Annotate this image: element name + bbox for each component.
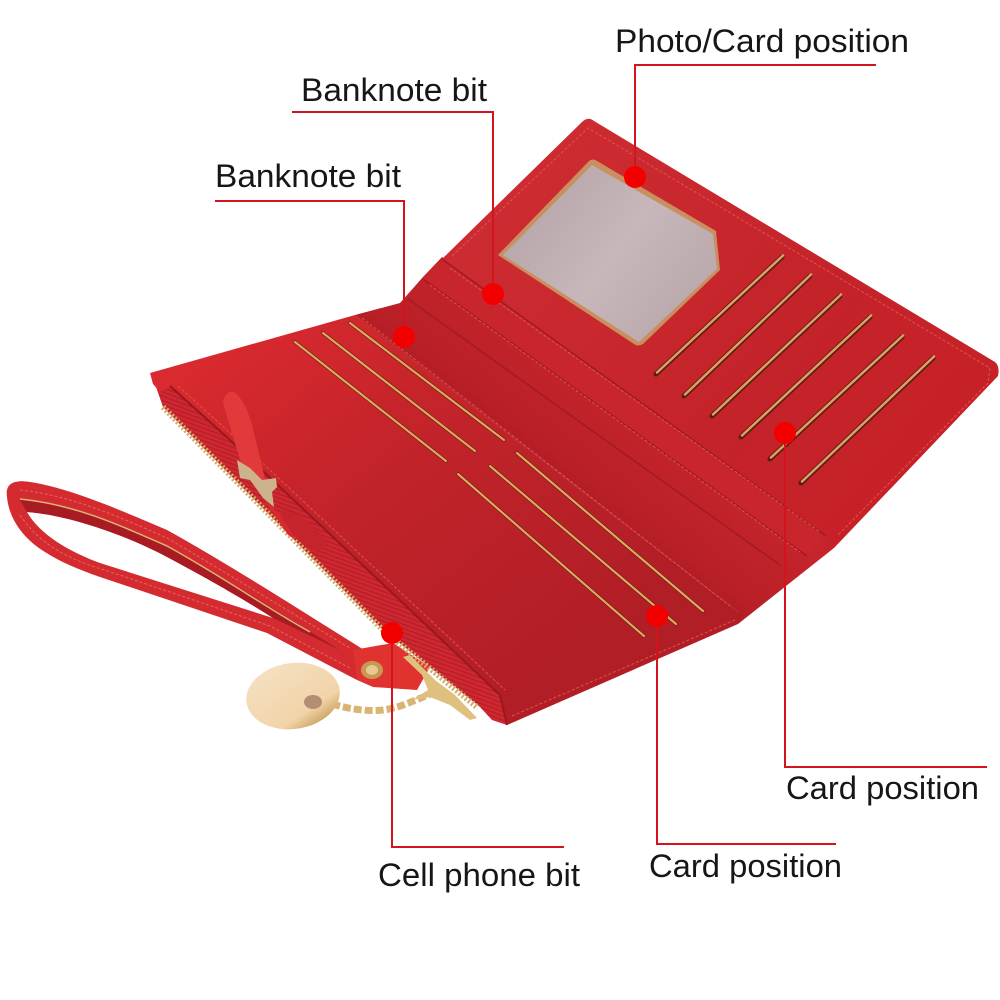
callout: cell phone bit	[378, 622, 580, 893]
callout: card position right	[774, 422, 987, 806]
callout: photo/card position	[615, 23, 909, 188]
callout: banknote bit lower	[215, 158, 415, 348]
callout: cell phone bit: Cell phone bit	[378, 857, 580, 893]
zipper lining	[155, 380, 507, 725]
callout: card position lower	[646, 605, 842, 884]
panel: centre banknote section	[355, 257, 834, 624]
panel: upper card flap	[442, 119, 999, 548]
callout: card position lower: Card position	[649, 848, 842, 884]
card slots lower panel	[295, 323, 703, 636]
pocket band	[423, 259, 826, 556]
stitching lines	[178, 128, 990, 716]
callout: photo/card position: Photo/Card position	[615, 23, 909, 59]
zipper slider	[403, 655, 477, 720]
gold chain	[322, 693, 433, 711]
zipper teeth	[163, 407, 478, 708]
callout: banknote bit upper	[292, 72, 504, 305]
panel: lower card section	[150, 315, 738, 725]
wallet	[7, 119, 999, 735]
card slots upper flap	[656, 256, 934, 483]
zipper pull tab	[223, 392, 327, 553]
callout: card position right: Card position	[786, 770, 979, 806]
callout: banknote bit lower: Banknote bit	[215, 158, 401, 194]
panel lower edge	[170, 386, 507, 725]
strap end tab with rivet	[353, 643, 430, 690]
photo window	[498, 160, 720, 346]
callout: banknote bit upper: Banknote bit	[301, 72, 487, 108]
pocket divider lines	[408, 259, 826, 565]
wrist strap	[7, 481, 430, 690]
coin charm	[242, 657, 344, 735]
